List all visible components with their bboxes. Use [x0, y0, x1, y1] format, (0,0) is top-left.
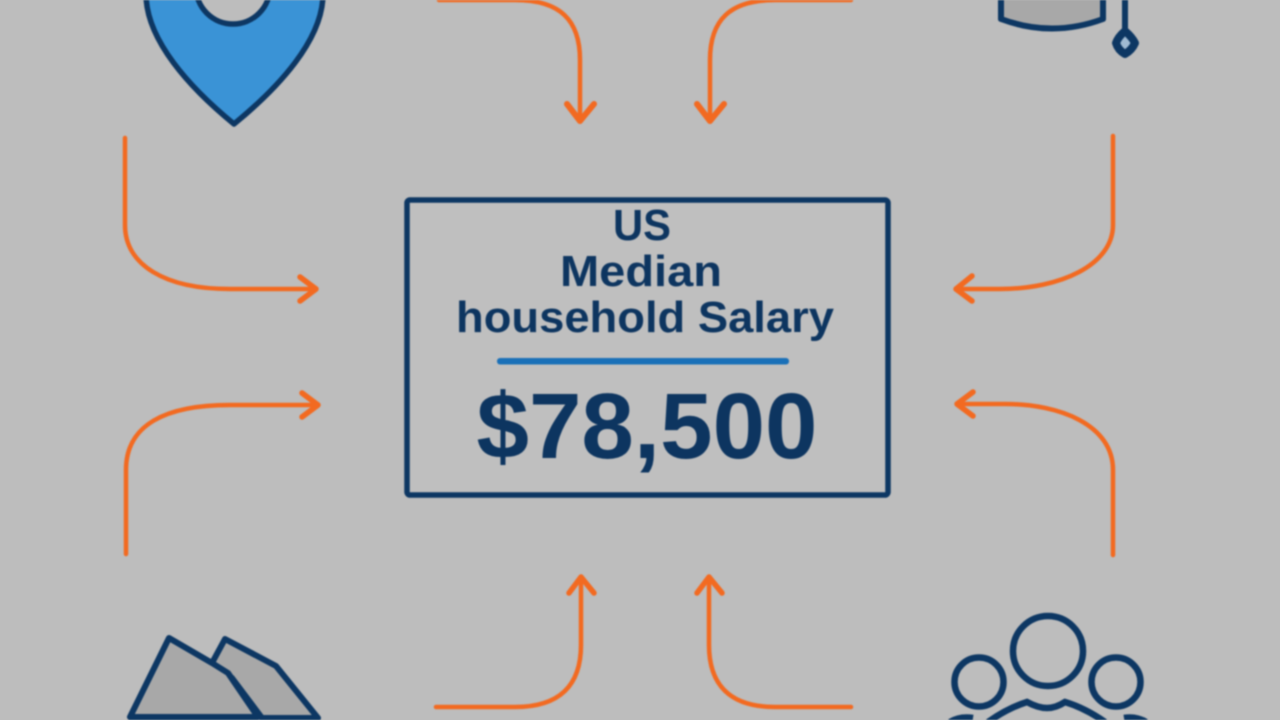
divider [497, 358, 789, 364]
icon: mountains [130, 638, 318, 718]
heading: US: US [613, 201, 671, 250]
icon: graduation cap [1001, 0, 1135, 54]
arrow: left lower [126, 393, 318, 554]
icon: people group [950, 616, 1146, 720]
heading: household Salary: household Salary [456, 293, 835, 342]
arrow: bottom-left inward [436, 577, 594, 707]
arrow: right upper [956, 136, 1113, 301]
arrow: top-right inward [697, 0, 851, 121]
value: salary: $78,500 [476, 374, 818, 478]
heading: Median: Median [560, 247, 722, 296]
arrow: right lower [957, 392, 1113, 555]
central salary panel [407, 200, 888, 495]
arrow: left upper [125, 138, 316, 301]
arrow: bottom-right inward [697, 577, 851, 707]
icon: location pin [146, 0, 323, 124]
arrow: top-left inward [439, 0, 594, 121]
